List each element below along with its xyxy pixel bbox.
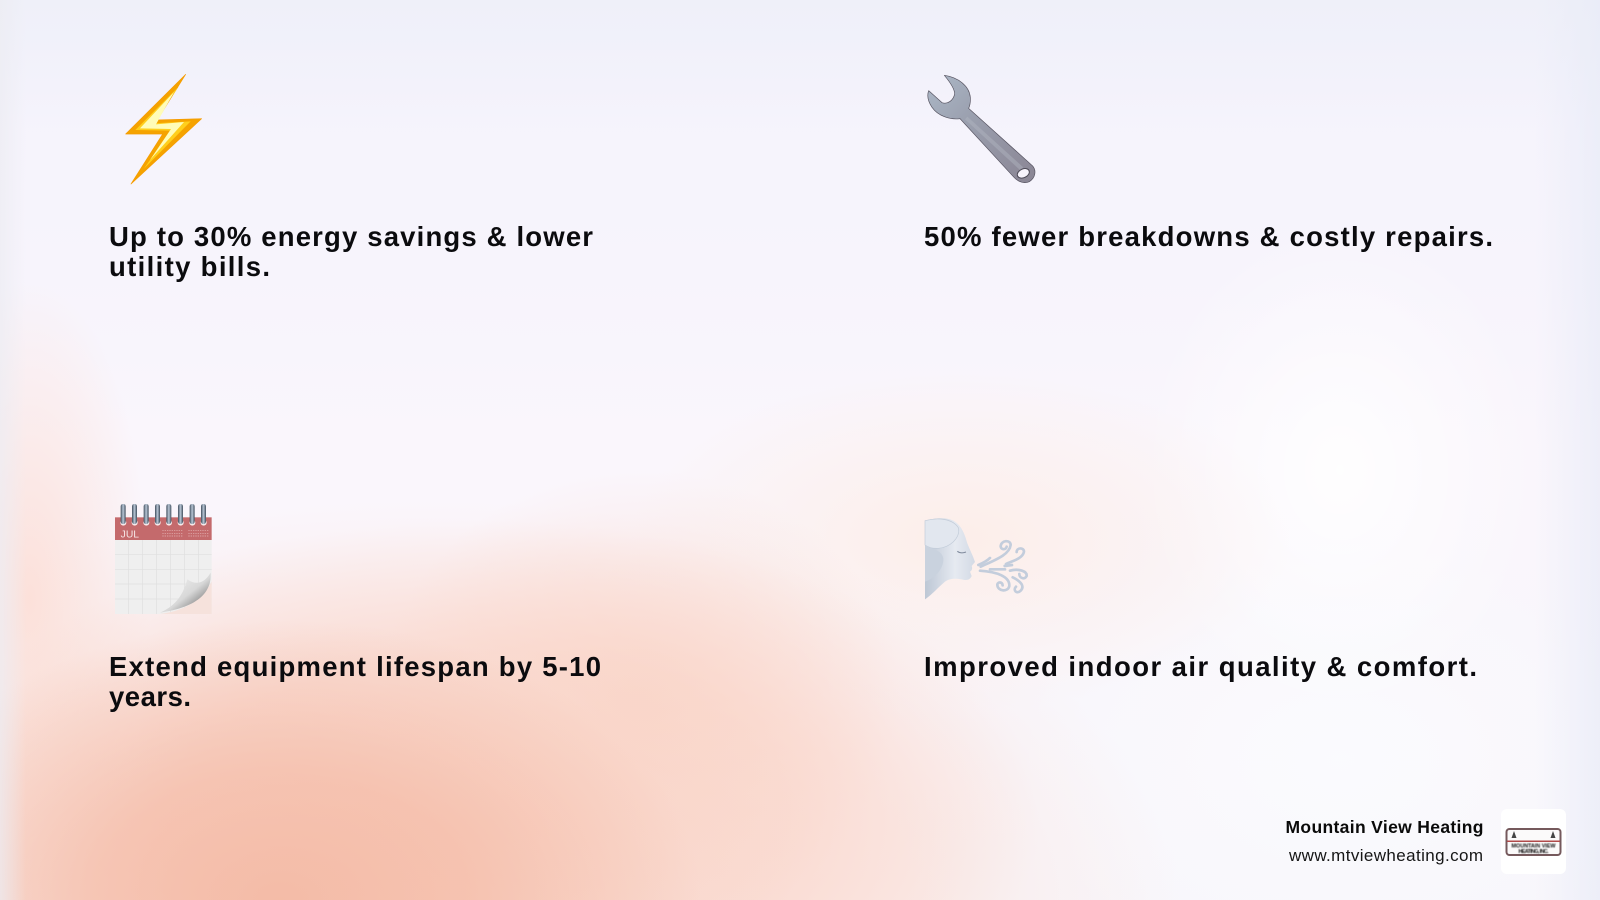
text: fewer breakdowns: 50% fewer breakdowns & costly repairs. (924, 221, 1493, 252)
text: energy savings: Up to 30% energy savings & lower (109, 221, 593, 252)
text: equipment lifespan: Extend equipment lifespan by 5-10 (109, 651, 601, 682)
text: energy savings: utility bills. (109, 251, 270, 282)
icon: spiral calendar (115, 504, 212, 614)
item: fewer breakdowns (924, 75, 1493, 252)
logo card: MOUNTAIN VIEW (1512, 844, 1556, 850)
item: energy savings (109, 74, 593, 282)
website url: www.mtviewheating.com (1288, 846, 1483, 865)
footer: brand block (1286, 809, 1566, 874)
icon: spiral calendar: JUL (121, 530, 139, 541)
brand name: Mountain View Heating (1286, 817, 1484, 837)
icon: wrench (928, 75, 1035, 183)
text: indoor air quality: Improved indoor air quality & comfort. (924, 651, 1477, 682)
icon: lightning bolt (126, 74, 202, 184)
logo card: HEATING, INC. (1518, 849, 1549, 855)
logo card (1501, 809, 1566, 874)
text: energy savings (109, 221, 593, 282)
item: indoor air quality (924, 518, 1477, 682)
text: equipment lifespan (109, 651, 601, 712)
text: equipment lifespan: years. (109, 681, 191, 712)
icon: wind blowing face (925, 518, 1027, 599)
item: equipment lifespan (109, 504, 601, 712)
